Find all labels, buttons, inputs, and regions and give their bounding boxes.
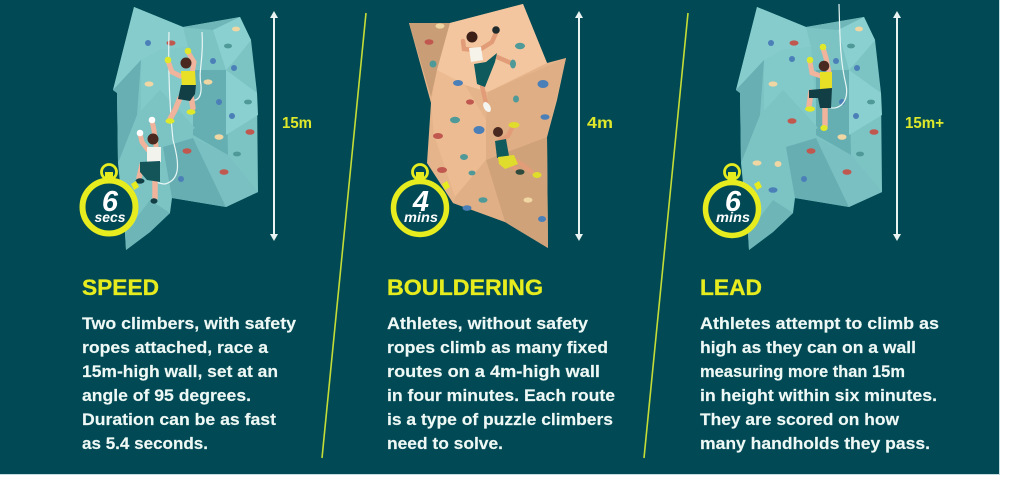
stopwatch: 6 mins: 6 — [725, 186, 742, 218]
heading: lead: LEAD — [700, 275, 762, 300]
lead climbing wall — [736, 7, 882, 250]
speed climbing wall — [113, 7, 258, 250]
divider — [322, 13, 366, 458]
stopwatch: 6 mins: mins — [716, 209, 750, 225]
description: bouldering: need to solve. — [387, 435, 503, 453]
description: lead: in height within six minutes. — [700, 387, 937, 405]
panel: bouldering — [387, 4, 615, 453]
upper boulderer — [463, 26, 516, 113]
height arrow: 4m — [575, 11, 583, 241]
stopwatch: 6 mins — [706, 164, 762, 236]
description: bouldering: routes on a 4m-high wall — [387, 363, 600, 381]
description: lead: high as they can on a wall — [700, 339, 916, 357]
panel: lead — [700, 4, 944, 453]
height label: 15m+ — [905, 115, 944, 132]
panel: speed — [82, 7, 312, 453]
divider — [644, 13, 688, 458]
stopwatch: 4 mins: mins — [404, 209, 438, 225]
heading: speed: SPEED — [82, 275, 159, 300]
description: lead: many handholds they pass. — [700, 435, 930, 453]
description: speed: ropes attached, race a — [82, 339, 269, 357]
lower climber — [136, 117, 161, 204]
safety rope — [826, 4, 847, 108]
description: bouldering — [387, 315, 615, 453]
stopwatch: 6 secs: secs — [94, 209, 126, 225]
stopwatch: 4 mins: 4 — [412, 186, 429, 218]
lower boulderer — [493, 122, 542, 178]
lead climber — [805, 44, 832, 131]
bouldering wall — [409, 4, 566, 248]
height label: 4m — [587, 115, 613, 132]
description: lead — [700, 315, 939, 453]
description: speed: Duration can be as fast — [82, 411, 277, 429]
description: speed: 15m-high wall, set at an — [82, 363, 278, 381]
description: speed: angle of 95 degrees. — [82, 387, 251, 405]
description: speed — [82, 315, 296, 453]
height arrow: 15m+ — [893, 11, 901, 241]
description: speed: as 5.4 seconds. — [82, 435, 208, 453]
heading: bouldering: BOULDERING — [387, 275, 543, 300]
description: bouldering: in four minutes. Each route — [387, 387, 615, 405]
height label: 15m — [282, 115, 312, 132]
stopwatch: 6 secs: 6 — [102, 186, 119, 218]
description: bouldering: ropes climb as many fixed — [387, 339, 608, 357]
description: bouldering: is a type of puzzle climbers — [387, 411, 613, 429]
height arrow: 15m — [270, 11, 278, 241]
description: speed: Two climbers, with safety — [82, 315, 296, 333]
stopwatch: 4 mins — [394, 164, 450, 234]
description: lead: They are scored on how — [700, 411, 899, 429]
description: bouldering: Athletes, without safety — [387, 315, 588, 333]
description: lead: Athletes attempt to climb as — [700, 315, 939, 333]
stopwatch: 6 secs — [82, 164, 139, 234]
description: lead: measuring more than 15m — [700, 363, 905, 381]
safety ropes — [146, 32, 202, 184]
upper climber — [165, 48, 196, 124]
